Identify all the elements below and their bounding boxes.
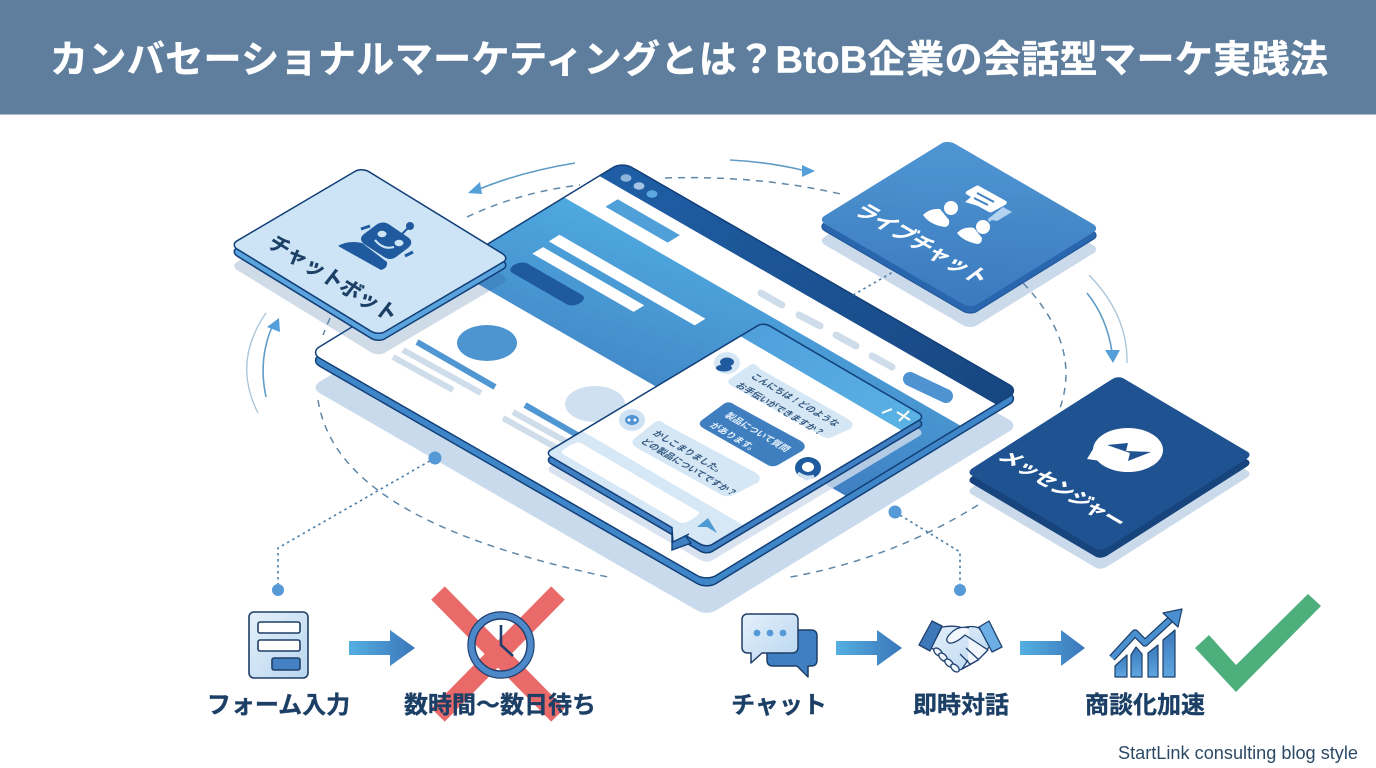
hero button xyxy=(510,262,584,306)
green check xyxy=(1195,594,1321,692)
label: chatbot: チャットボット xyxy=(263,231,403,327)
bot message 2 xyxy=(632,421,760,498)
chat footer xyxy=(549,432,743,545)
live chat card xyxy=(818,140,1100,329)
connector: form xyxy=(272,452,442,596)
label: deal acceleration: 商談化加速 xyxy=(1085,692,1205,719)
chat window shadow xyxy=(545,338,925,564)
connector: chat xyxy=(888,506,966,596)
icon: handshake xyxy=(919,621,1002,674)
chat face xyxy=(537,320,929,552)
arrow: dialogue to deal xyxy=(1020,630,1085,666)
avatar bot lower xyxy=(619,409,645,431)
messenger card xyxy=(966,375,1253,571)
speech tail face xyxy=(672,525,689,542)
logo block xyxy=(605,199,680,243)
icon: clock xyxy=(468,612,534,678)
card edge xyxy=(230,174,510,343)
main browser window xyxy=(306,158,1026,589)
card face xyxy=(966,375,1253,552)
content block left xyxy=(393,325,517,393)
bot message 1 xyxy=(728,364,853,438)
hero band xyxy=(445,195,965,498)
card shadow xyxy=(230,188,510,357)
arrow: right xyxy=(1087,275,1127,363)
browser title bar xyxy=(595,158,1026,407)
card edge xyxy=(818,147,1100,315)
minimize and close xyxy=(882,409,910,421)
browser shadow xyxy=(310,197,1019,616)
card face xyxy=(818,140,1100,308)
icon: agents with chat xyxy=(923,186,1012,244)
chat slab edge xyxy=(545,329,925,555)
icon: messenger bubble xyxy=(1087,428,1163,472)
credit: StartLink consulting blog style xyxy=(1118,743,1358,763)
chat header strip xyxy=(741,325,921,430)
card edge xyxy=(966,383,1253,560)
orbit dashed ring xyxy=(318,178,1066,578)
label: instant dialogue: 即時対話 xyxy=(913,692,1009,719)
chat widget xyxy=(537,320,929,555)
label: waiting: 数時間〜数日待ち xyxy=(404,692,596,719)
chatbot card xyxy=(230,167,510,357)
user message xyxy=(700,402,805,466)
bot message 1: こんにちは！どのような xyxy=(748,372,843,428)
icon: form xyxy=(249,612,308,678)
nav button xyxy=(910,379,946,396)
label: chat: チャット xyxy=(731,692,827,719)
label: live chat: ライブチャット xyxy=(848,200,996,288)
speech tail slab xyxy=(672,532,691,550)
card shadow xyxy=(818,161,1100,329)
icon: chat bubbles xyxy=(742,614,817,677)
hero headline bars xyxy=(532,234,706,326)
arrow: form to wait xyxy=(349,630,415,666)
header band xyxy=(0,0,1376,114)
card shadow xyxy=(966,394,1253,571)
arrow: chat to dialogue xyxy=(836,630,902,666)
bot message 2: どの製品についてですか？ xyxy=(638,437,740,498)
user message: があります。 xyxy=(707,421,762,454)
connector: live chat xyxy=(853,272,893,295)
bot message 1: お手伝いができますか？ xyxy=(733,381,828,437)
chat input xyxy=(559,441,702,524)
browser face xyxy=(306,158,1026,583)
arrow: top right xyxy=(730,160,815,177)
card face xyxy=(230,167,510,336)
content block right xyxy=(503,386,625,461)
nav pills xyxy=(761,293,892,367)
send icon xyxy=(697,518,717,533)
red cross xyxy=(438,593,558,715)
arrow: top left xyxy=(468,163,575,194)
label: form input: フォーム入力 xyxy=(207,692,350,719)
icon: growth chart xyxy=(1112,609,1182,677)
title: カンバセーショナルマーケティングとは？BtoB企業の会話型マーケ実践法 xyxy=(50,40,1328,82)
icon: robot xyxy=(338,222,414,270)
avatar bot top xyxy=(714,352,740,374)
browser slab edge xyxy=(310,170,1019,589)
label: messenger: メッセンジャー xyxy=(993,447,1131,532)
avatar person xyxy=(795,457,821,479)
window dots xyxy=(620,174,658,198)
user message: 製品について質問 xyxy=(722,411,793,453)
bot message 2: かしこまりました。 xyxy=(650,429,728,476)
arrow: left xyxy=(247,313,280,413)
